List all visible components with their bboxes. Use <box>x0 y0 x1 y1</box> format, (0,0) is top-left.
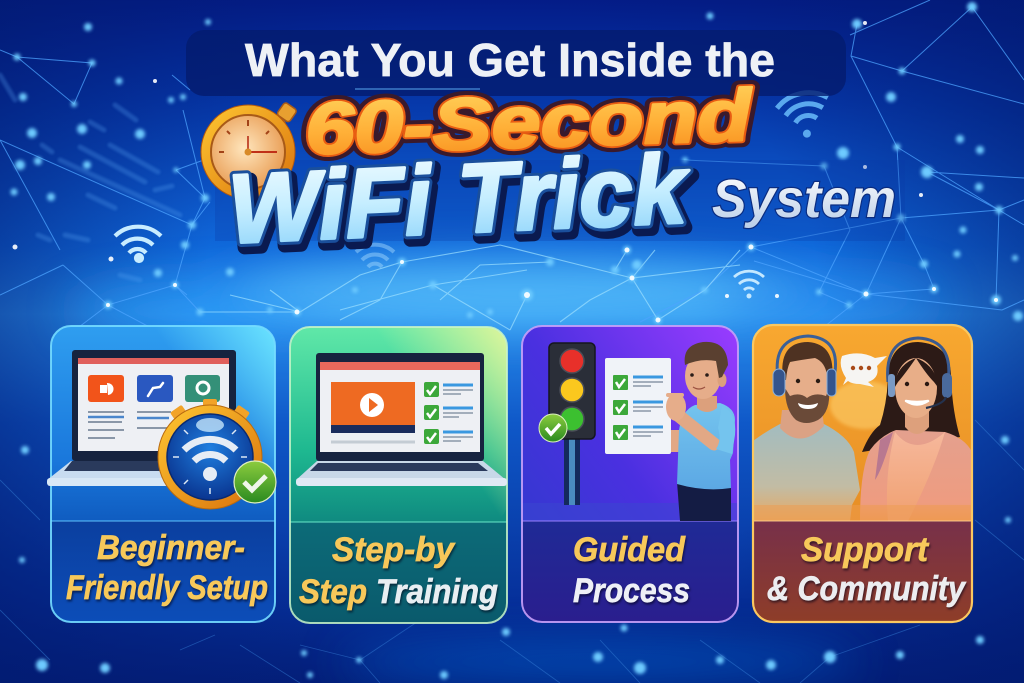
panel: step-by step training <box>290 327 507 623</box>
speech bubble <box>841 353 887 387</box>
traffic light <box>549 343 595 505</box>
label: Guided <box>573 531 686 569</box>
checklist sheet <box>605 358 671 454</box>
man with headset <box>753 336 860 521</box>
label <box>573 531 690 610</box>
check badge <box>539 414 567 442</box>
title banner <box>186 30 905 241</box>
icon: wifi left <box>115 227 161 261</box>
title: 60-Second: 60-Second <box>304 75 754 170</box>
laptop with app screen <box>47 350 271 486</box>
title: WiFi Trick: WiFi Trick <box>226 133 693 264</box>
panel: support and community <box>753 325 972 622</box>
title: What You Get Inside the: What You Get Inside the <box>245 34 775 86</box>
title: 60-Second: 60-Second <box>304 75 754 170</box>
label: Training <box>376 573 498 611</box>
boy arm and hand <box>666 393 735 454</box>
icon: wifi lower right <box>734 271 764 298</box>
stopwatch with wifi <box>158 399 262 509</box>
label: Friendly Setup <box>66 569 268 607</box>
title: 60-Second: 60-Second <box>304 75 754 170</box>
panel: guided process <box>522 326 738 622</box>
laptop with video lesson <box>296 353 507 486</box>
title: WiFi Trick: WiFi Trick <box>226 133 693 264</box>
title: System: System <box>712 169 896 229</box>
label: Step-by <box>332 531 456 569</box>
label: Process <box>573 572 690 610</box>
label: Step <box>299 573 367 611</box>
label: Beginner- <box>97 529 245 567</box>
woman with headset <box>860 338 972 521</box>
label <box>66 529 268 607</box>
boy holding checklist <box>668 342 735 521</box>
icon: wifi faint centre <box>356 245 394 267</box>
label <box>299 531 498 611</box>
label: Support <box>801 531 930 569</box>
panel: beginner-friendly setup <box>47 326 276 622</box>
title: WiFi Trick: WiFi Trick <box>229 138 696 269</box>
check badge <box>234 461 276 503</box>
icon: wifi top right <box>775 88 835 143</box>
label <box>767 531 967 608</box>
icon: title stopwatch <box>201 102 297 199</box>
label: & Community <box>767 570 967 608</box>
